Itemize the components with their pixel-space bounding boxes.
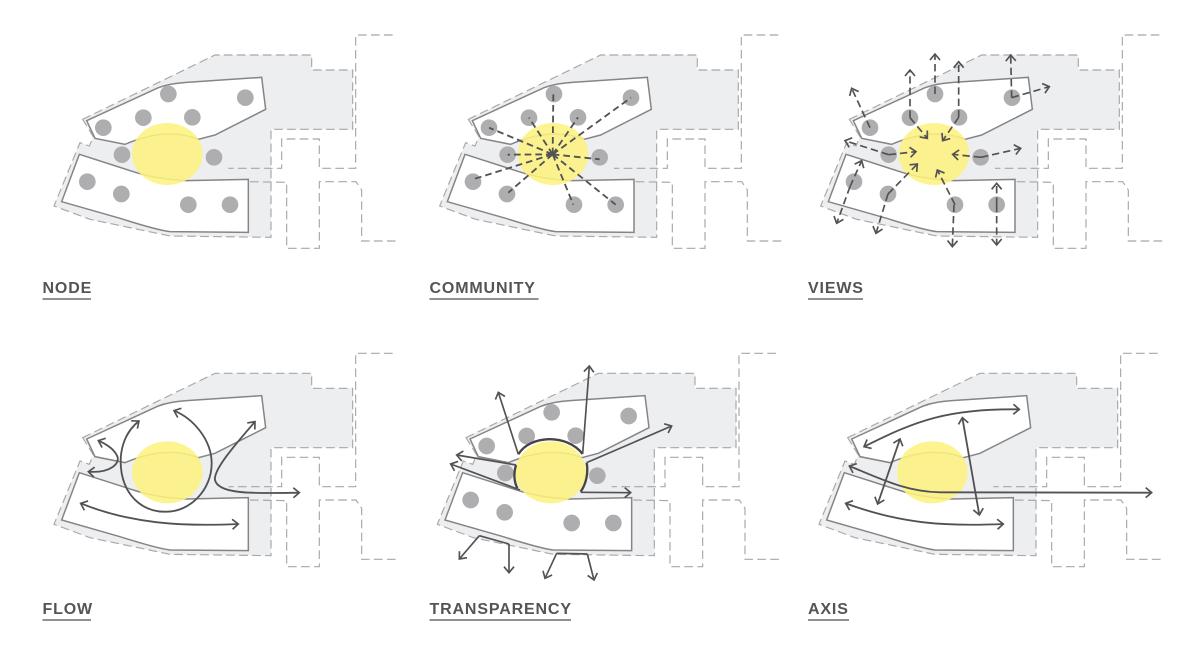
panel: community [430, 35, 784, 299]
panel: transparency [430, 353, 782, 620]
diagram: flow [54, 353, 398, 567]
dashed radial connections [473, 94, 631, 205]
label: community: COMMUNITY [430, 280, 536, 297]
axis arrows [846, 409, 1152, 525]
grey node dots [79, 86, 254, 213]
diagram: views [821, 35, 1165, 248]
label: transparency: TRANSPARENCY [430, 601, 572, 618]
panel: views [808, 35, 1165, 299]
yellow central node [518, 123, 588, 185]
panel: flow [42, 353, 398, 620]
site plan base [819, 353, 1163, 567]
label: views: VIEWS [808, 280, 864, 297]
label: flow: FLOW [42, 601, 93, 618]
site plan base [440, 35, 784, 248]
panel: node [42, 35, 398, 299]
dashed view arrows [837, 54, 1049, 247]
diagram: axis [819, 353, 1163, 567]
yellow central node [899, 123, 969, 185]
yellow central node [515, 441, 586, 503]
diagram: transparency [437, 353, 782, 580]
outward transparency arrows [451, 366, 672, 580]
site plan base [54, 353, 398, 567]
yellow central node [132, 441, 203, 503]
label: axis: AXIS [808, 601, 849, 618]
site plan base [54, 35, 398, 248]
label: node: NODE [42, 280, 92, 297]
grey community dots [465, 86, 639, 213]
flow arrows [81, 411, 299, 525]
diagram: community [440, 35, 784, 248]
yellow central node [897, 441, 968, 503]
yellow central node [132, 123, 203, 185]
grey dots [462, 404, 637, 531]
diagram: node [54, 35, 398, 248]
site plan base [437, 353, 782, 567]
site plan base [821, 35, 1165, 248]
thick facade lines [479, 439, 587, 554]
panel: axis [808, 353, 1163, 620]
grey view dots [846, 86, 1020, 213]
